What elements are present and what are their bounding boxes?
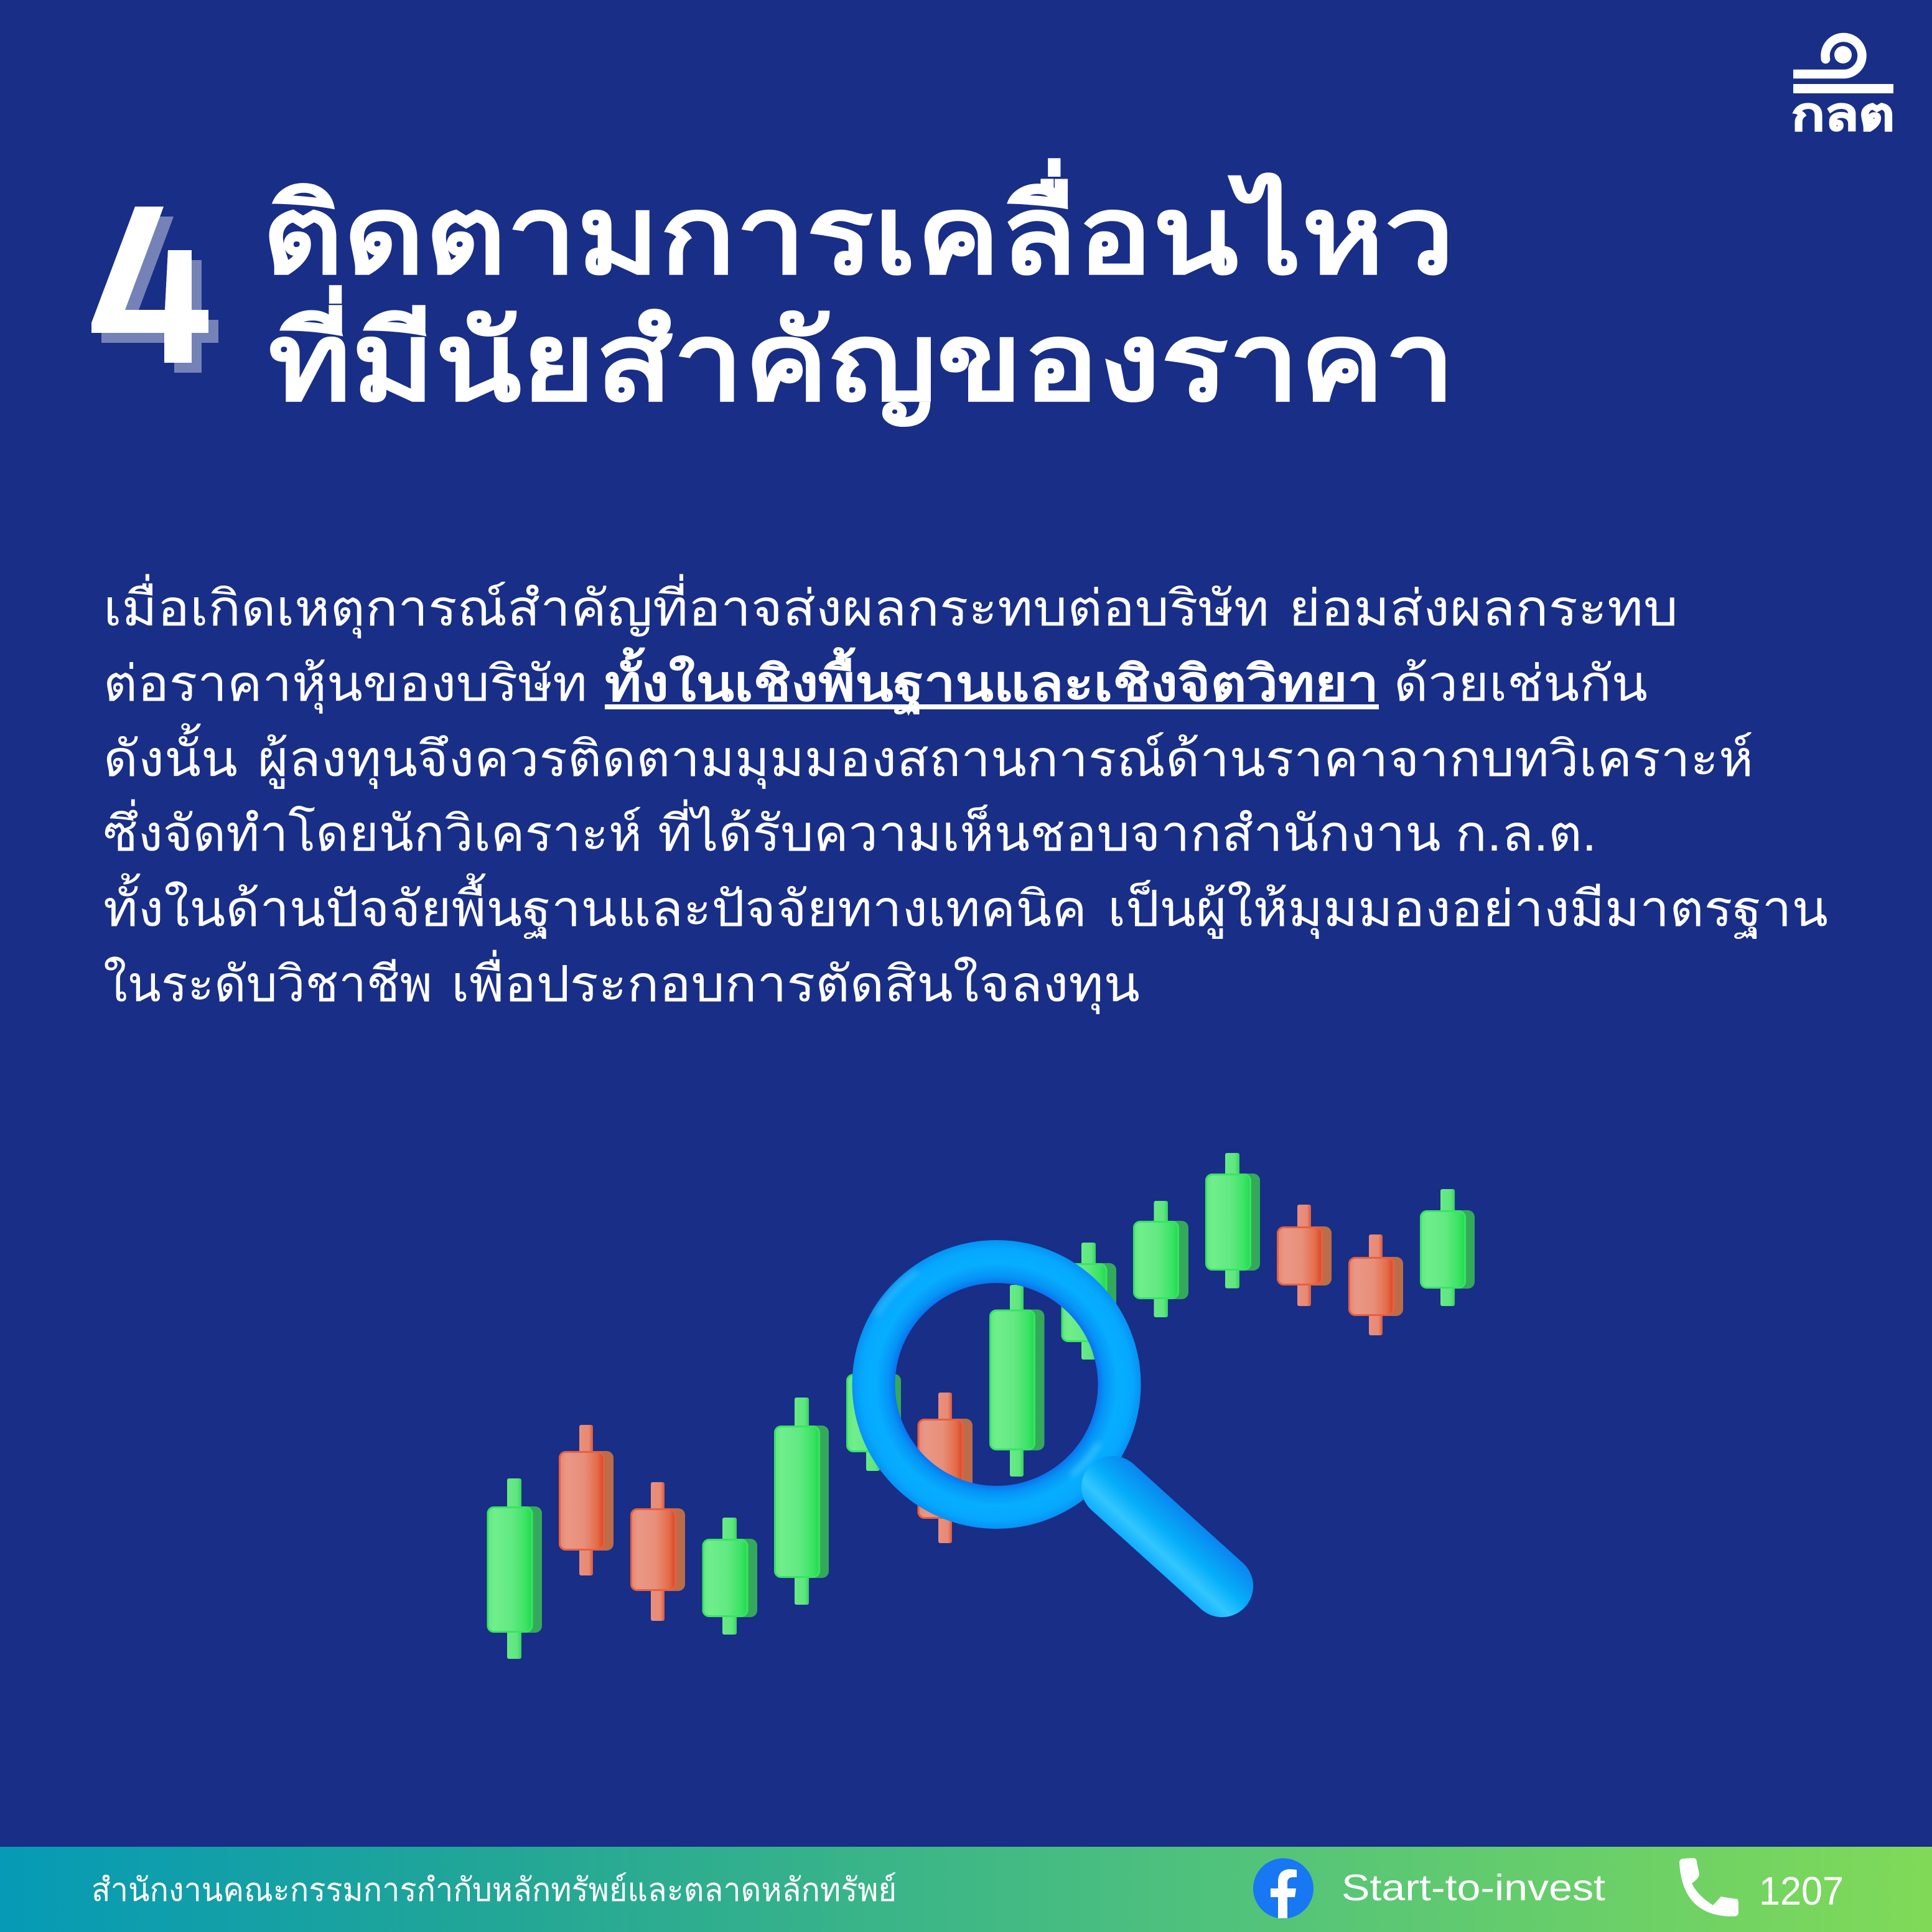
footer band (0, 1847, 1932, 1932)
candle 10 green (1133, 1201, 1188, 1317)
magnifier handle front (1113, 1487, 1139, 1511)
body line 2 emphasis: ทั้งในเชิงพื้นฐานและเชิงจิตวิทยา (605, 647, 1379, 716)
ring highlight upper left (876, 1271, 917, 1315)
body line 2 start: ต่อราคาหุ้นของบริษัท (103, 656, 587, 714)
emphasis underline (605, 704, 1379, 709)
candle 14 green (1420, 1189, 1475, 1306)
body paragraph (103, 574, 1828, 1014)
logo bar (1793, 84, 1893, 93)
candle 7 red (917, 1393, 973, 1543)
candle 3 red (630, 1482, 685, 1621)
icon: logo center dot (1834, 46, 1852, 63)
title line 2: ที่มีนัยสำคัญของราคา (268, 285, 1455, 427)
ring highlight lower right (1071, 1443, 1099, 1475)
body line 6 part 2: เพื่อประกอบการตัดสินใจลงทุน (451, 950, 1140, 1014)
candle 6 green (846, 1353, 901, 1471)
candlestick chart (487, 1153, 1475, 1659)
footer organisation name: สำนักงานคณะกรรมการกำกับหลักทรัพย์และตลาดหลักทรัพย์ (91, 1872, 897, 1908)
number: 4 (87, 164, 212, 410)
phone number: 1207 (1759, 1869, 1844, 1913)
icon: logo swirl (1793, 37, 1862, 74)
icon: logo swirl end (1821, 55, 1830, 63)
magnifier handle (1113, 1487, 1222, 1586)
candle 1 green (487, 1478, 542, 1659)
icon: magnifying glass (874, 1262, 1222, 1586)
body line 6 part 1: ในระดับวิชาชีพ (103, 956, 432, 1012)
candle 9 green (1062, 1243, 1116, 1360)
body line 3 part 2: ผู้ลงทุนจึงควรติดตามมุมมองสถานการณ์ด้านราคาจากบทวิเคราะห์ (258, 731, 1753, 789)
logo (1791, 37, 1895, 140)
candle 11 green (1205, 1153, 1260, 1288)
logo wordmark: กลต (1791, 88, 1895, 140)
candle 12 red (1277, 1205, 1332, 1306)
icon: phone (1679, 1858, 1738, 1916)
candle 5 green (774, 1398, 829, 1605)
candle 8 green (989, 1285, 1044, 1477)
body line 5 part 2: เป็นผู้ให้มุมมองอย่างมีมาตรฐาน (1108, 879, 1828, 939)
number shadow: 4 (97, 174, 222, 420)
title (262, 158, 1455, 427)
body line 1 part 2: ย่อมส่งผลกระทบ (1289, 581, 1678, 636)
body line 3 part 1: ดังนั้น (103, 723, 238, 786)
body line 5 part 1: ทั้งในด้านปัจจัยพื้นฐานและปัจจัยทางเทคนิค (103, 873, 1087, 939)
candle 13 red (1348, 1234, 1403, 1335)
footer gradient (0, 1847, 1932, 1932)
title line 1: ติดตามการเคลื่อนไหว (262, 158, 1455, 297)
facebook page name: Start-to-invest (1342, 1867, 1605, 1908)
big number 4 (91, 207, 218, 373)
body line 4 part 1: ซึ่งจัดทำโดยนักวิเคราะห์ (103, 800, 642, 861)
body line 4 part 2: ที่ได้รับความเห็นชอบจากสำนักงาน ก.ล.ต. (658, 800, 1597, 861)
body line 2 end: ด้วยเช่นกัน (1394, 656, 1648, 711)
icon: facebook (1253, 1858, 1314, 1919)
magnifier ring (874, 1262, 1119, 1507)
candle 2 red (559, 1425, 614, 1575)
candle 4 green (702, 1518, 757, 1635)
body line 1 part 1: เมื่อเกิดเหตุการณ์สำคัญที่อาจส่งผลกระทบต่อบริษัท (103, 574, 1269, 638)
